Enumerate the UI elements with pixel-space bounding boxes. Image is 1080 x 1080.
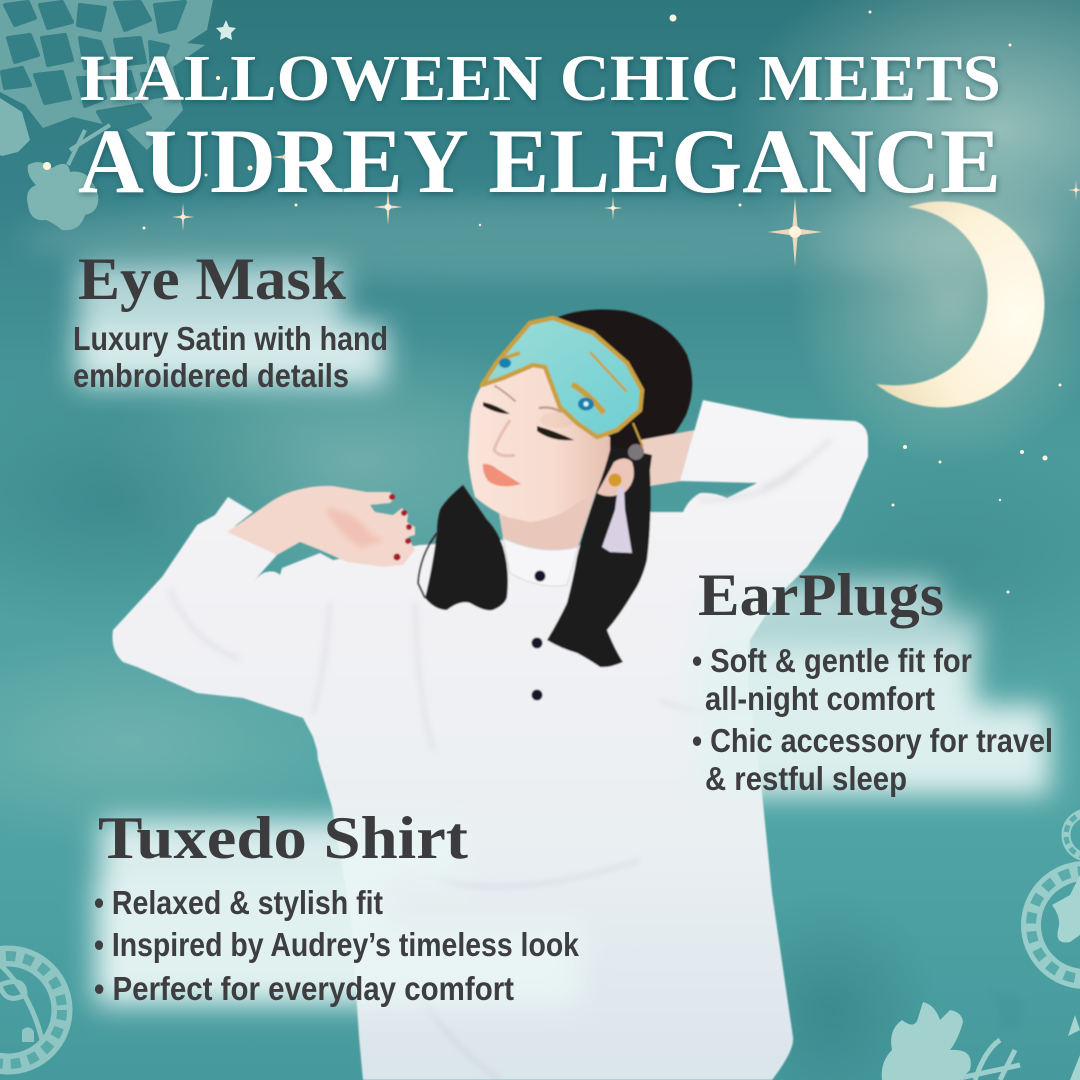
nose shade bbox=[494, 420, 515, 456]
glow behind eye mask text bbox=[76, 265, 386, 385]
ear bbox=[597, 458, 634, 496]
bullet list bbox=[692, 642, 1053, 797]
bullet list: • Inspired by Audrey’s timeless look bbox=[94, 926, 580, 963]
shirt bbox=[112, 400, 868, 1080]
callout: earplugs bbox=[692, 562, 1053, 797]
buttons bbox=[532, 570, 546, 700]
tassel bbox=[602, 487, 632, 553]
hand raised at shoulder bbox=[227, 486, 415, 567]
decoration: paper lace bottom-right bbox=[882, 813, 1080, 1080]
callout: tuxedo shirt bbox=[94, 805, 580, 1007]
glow behind earplugs text bbox=[695, 582, 1050, 795]
strap bbox=[633, 423, 643, 447]
title: HALLOWEEN CHIC MEETS bbox=[80, 42, 1001, 115]
title: AUDREY ELEGANCE bbox=[78, 110, 1001, 212]
bullet list bbox=[94, 884, 580, 1007]
collar bbox=[503, 538, 578, 586]
eyes closed bbox=[483, 402, 574, 440]
callout: eye mask bbox=[73, 246, 388, 394]
face bbox=[468, 365, 610, 522]
front hair over shirt bbox=[418, 445, 652, 667]
person: stretching woman in white tuxedo shirt and eye mask bbox=[112, 309, 868, 1080]
shirt folds bbox=[170, 440, 830, 1080]
decoration: paper flowers top-left bbox=[0, 20, 236, 230]
heading: EarPlugs bbox=[698, 562, 944, 628]
decoration: paper lace top-left bbox=[0, 0, 213, 150]
lips bbox=[483, 464, 521, 486]
description: Luxury Satin with hand bbox=[73, 320, 388, 357]
decoration: paper lace bottom-left bbox=[0, 956, 62, 1064]
bullet list: • Perfect for everyday comfort bbox=[94, 970, 514, 1007]
description bbox=[73, 320, 388, 394]
forearm behind head bbox=[640, 430, 695, 486]
earplug bbox=[608, 474, 622, 486]
glow behind tuxedo shirt text bbox=[95, 820, 580, 1005]
bullet list: all-night comfort bbox=[705, 680, 935, 717]
eye mask bbox=[482, 318, 642, 437]
description: embroidered details bbox=[73, 357, 349, 394]
bullet list: & restful sleep bbox=[705, 760, 907, 797]
title bbox=[78, 42, 1001, 212]
hair back and updo bbox=[558, 309, 692, 470]
heading: Eye Mask bbox=[78, 246, 347, 312]
bullet list: • Relaxed & stylish fit bbox=[94, 884, 383, 921]
bullet list: • Soft & gentle fit for bbox=[692, 642, 972, 679]
heading: Tuxedo Shirt bbox=[98, 805, 468, 871]
strap dot bbox=[628, 444, 644, 460]
neck bbox=[495, 480, 600, 550]
eyeshadow and brows bbox=[495, 386, 576, 428]
stars and sparkles bbox=[43, 10, 1080, 594]
crescent moon bbox=[790, 145, 1080, 465]
